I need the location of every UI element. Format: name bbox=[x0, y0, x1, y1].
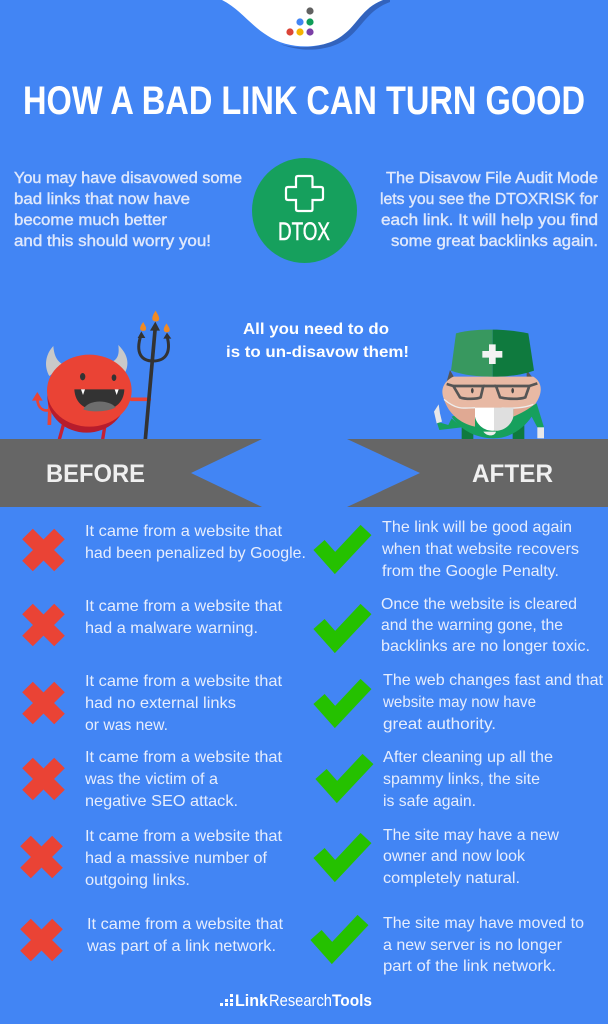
row 3 after: website may now have bbox=[382, 694, 536, 711]
row 2 before: It came from a website that bbox=[85, 598, 283, 615]
footer logo: Tools bbox=[332, 991, 372, 1010]
row 1 before bbox=[28, 523, 306, 566]
row 2 after: backlinks are no longer toxic. bbox=[381, 638, 590, 655]
row 4 after bbox=[321, 749, 553, 810]
row 4 before: was the victim of a bbox=[84, 771, 218, 788]
intro text left: become much better bbox=[14, 212, 168, 229]
DTOX badge bbox=[252, 158, 357, 263]
call to action: is to un-disavow them! bbox=[226, 344, 409, 361]
row 6 before: It came from a website that bbox=[87, 916, 284, 933]
illustration: doctor bbox=[434, 330, 544, 439]
icon: check bbox=[319, 609, 366, 642]
row 3 before: or was new. bbox=[85, 717, 168, 734]
row 2 before bbox=[28, 598, 283, 641]
row 5 after: The site may have a new bbox=[383, 827, 559, 844]
row 3 before: It came from a website that bbox=[85, 673, 283, 690]
intro text right: some great backlinks again. bbox=[391, 233, 598, 250]
row 5 before: had a massive number of bbox=[85, 850, 268, 867]
before banner bbox=[0, 439, 262, 507]
row 1 before: had been penalized by Google. bbox=[85, 545, 306, 562]
row 5 before bbox=[26, 828, 283, 889]
row 6 before bbox=[26, 916, 284, 956]
intro text left: You may have disavowed some bbox=[14, 170, 242, 187]
row 6 before: was part of a link network. bbox=[86, 938, 276, 955]
icon: cross bbox=[28, 609, 60, 641]
after banner bbox=[347, 439, 608, 507]
intro text left bbox=[14, 170, 242, 250]
row 3 after: great authority. bbox=[383, 716, 496, 733]
icon: medical cross bbox=[286, 176, 323, 211]
row 5 after bbox=[319, 827, 559, 887]
intro text right: lets you see the DTOXRISK for bbox=[380, 191, 599, 208]
row 2 before: had a malware warning. bbox=[85, 620, 258, 637]
row 6 after: part of the link network. bbox=[383, 958, 556, 975]
footer logo: Research bbox=[269, 991, 332, 1010]
row 3 after bbox=[319, 672, 604, 733]
icon: check bbox=[316, 920, 363, 953]
row 4 after: After cleaning up all the bbox=[383, 749, 553, 766]
intro text right bbox=[380, 170, 599, 250]
DTOX badge: DTOX bbox=[278, 218, 330, 246]
row 3 after: The web changes fast and that bbox=[383, 672, 604, 689]
intro text right: The Disavow File Audit Mode bbox=[386, 170, 598, 187]
icon: check bbox=[319, 684, 366, 717]
row 5 after: owner and now look bbox=[383, 848, 526, 865]
row 6 after: a new server is no longer bbox=[383, 937, 563, 954]
icon: cross bbox=[26, 841, 58, 873]
call to action: All you need to do bbox=[243, 321, 389, 338]
row 5 after: completely natural. bbox=[383, 870, 520, 887]
row 3 before bbox=[28, 673, 283, 734]
row 1 after: when that website recovers bbox=[381, 541, 579, 558]
icon: check bbox=[319, 530, 366, 563]
row 6 after bbox=[316, 915, 584, 975]
row 5 before: It came from a website that bbox=[85, 828, 283, 845]
top logo tab bbox=[222, 0, 390, 50]
before banner: BEFORE bbox=[46, 460, 145, 488]
icon: check bbox=[319, 838, 366, 871]
icon: cross bbox=[28, 687, 60, 719]
row 1 after: from the Google Penalty. bbox=[382, 563, 559, 580]
row 2 after: Once the website is cleared bbox=[381, 596, 577, 613]
icon: cross bbox=[28, 534, 60, 566]
row 3 before: had no external links bbox=[85, 695, 236, 712]
row 1 before: It came from a website that bbox=[85, 523, 283, 540]
row 4 before: negative SEO attack. bbox=[85, 793, 238, 810]
intro text left: and this should worry you! bbox=[14, 233, 211, 250]
illustration: devil with trident bbox=[32, 311, 171, 439]
icon: cross bbox=[26, 924, 58, 956]
call to action bbox=[226, 321, 409, 361]
icon: cross bbox=[28, 763, 60, 795]
intro text left: bad links that now have bbox=[14, 191, 190, 208]
row 2 after bbox=[319, 596, 590, 655]
footer logo bbox=[220, 991, 372, 1010]
icon: check bbox=[321, 759, 368, 792]
after banner: AFTER bbox=[472, 460, 553, 488]
row 4 before: It came from a website that bbox=[85, 749, 283, 766]
row 1 after bbox=[319, 519, 579, 580]
intro text right: each link. It will help you find bbox=[381, 212, 598, 229]
row 4 after: spammy links, the site bbox=[383, 771, 540, 788]
row 4 after: is safe again. bbox=[383, 793, 476, 810]
row 2 after: and the warning gone, the bbox=[381, 617, 563, 634]
row 5 before: outgoing links. bbox=[85, 872, 190, 889]
row 4 before bbox=[28, 749, 283, 810]
footer logo: Link bbox=[235, 991, 269, 1010]
row 6 after: The site may have moved to bbox=[383, 915, 584, 932]
row 1 after: The link will be good again bbox=[382, 519, 572, 536]
